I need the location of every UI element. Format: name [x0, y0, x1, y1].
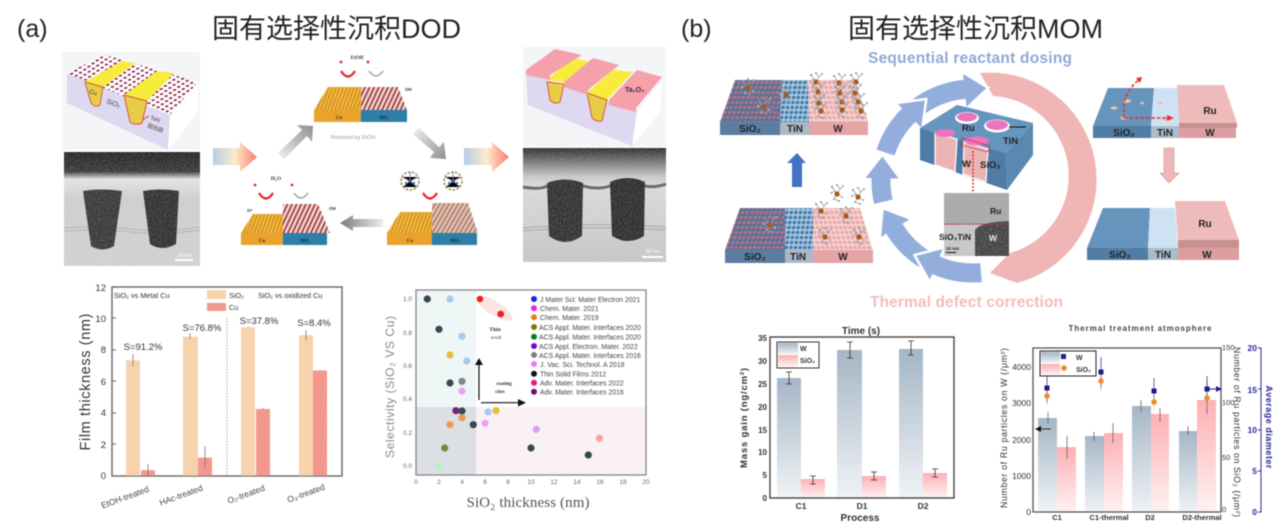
arrow: grey left	[340, 215, 383, 231]
panel: TEM image before deposition: 50 nm	[178, 253, 192, 259]
chart: selectivity scatter plot: 10	[527, 479, 535, 486]
panel: slab, second dose: W	[833, 124, 843, 135]
panel: slab, first dose: SiO₂	[744, 252, 766, 263]
arrow: gradient arrow to result	[464, 142, 509, 172]
legend: SiO₂	[800, 358, 815, 365]
panel: central TEM inset: Ru	[990, 206, 1001, 216]
arrow: grey down-right	[413, 128, 446, 159]
heading: thermal defect correction: Thermal defect correction	[870, 294, 1063, 311]
title: DOD: 固有选择性沉积DOD	[212, 14, 461, 44]
legend: J. Vac. Sci. Technol. A 2018	[540, 362, 625, 369]
panel: selective Ta2O5 schematic	[523, 47, 666, 147]
panel: ALD cycle, EtOH restored surface	[314, 56, 412, 141]
panel: precursor step surface	[387, 172, 478, 245]
chart: mass gain: 25	[758, 380, 768, 389]
legend: Cu	[229, 303, 238, 312]
chart: film thickness bar chart: 6	[101, 377, 106, 388]
panel: central Ru/W/SiO2 block	[920, 105, 1033, 193]
panel label (a): (a)	[17, 15, 48, 43]
legend: Chem. Mater. 2019	[540, 315, 599, 322]
chart: film thickness bar chart: 10	[95, 314, 106, 325]
chart: Ru particle density: C1	[1052, 513, 1062, 522]
blue arrow 4	[846, 54, 1100, 308]
legend: ACS Appl. Mater. Interfaces 2020	[539, 325, 641, 332]
panel: central Ru/W/SiO2 block: W	[962, 159, 971, 170]
legend: ACS Appl. Electron. Mater. 2022	[539, 344, 638, 351]
panel: H2O step surface: H₂O	[271, 176, 282, 182]
chart: Ru particle density: Number of Ru particles on SiO₂ (/μm²)	[1232, 347, 1242, 517]
chart: selectivity scatter plot: SiO₂ thickness (nm)	[466, 495, 590, 511]
panel: slab with particles: Ru	[1203, 106, 1217, 117]
chart: selectivity scatter plot: Thin	[489, 327, 501, 333]
chart: Ru particle density: 4000	[1012, 362, 1031, 372]
chart: film thickness bar chart: 12	[95, 283, 106, 294]
SiO2 bars	[126, 327, 313, 476]
chart: mass gain: 10	[758, 448, 768, 457]
panel: initial Cu/SiO2 trench schematic: 阻挡层	[146, 121, 165, 135]
chart: Ru particle density: C1-thermal	[1089, 513, 1129, 522]
panel: H2O step surface	[241, 176, 336, 245]
chart: selectivity scatter plot: 0	[414, 479, 418, 486]
chart: Ru particle density: 15	[1248, 385, 1257, 395]
panel: H2O step surface: O*	[247, 208, 253, 213]
legend: W	[1076, 355, 1083, 362]
chart: selectivity scatter plot: 2	[437, 479, 441, 486]
chart: film thickness bar chart: EtOH-treated	[100, 484, 150, 510]
panel: TEM image before deposition	[64, 152, 200, 266]
chart: mass gain: 20	[758, 403, 768, 412]
blue arrow 5	[873, 81, 1073, 282]
W bars	[1038, 406, 1197, 512]
panel: central Ru/W/SiO2 block: Ru	[962, 123, 975, 134]
W bars	[777, 349, 923, 498]
panel: slab with continuous Ru	[1087, 201, 1239, 261]
chart: selectivity scatter plot	[383, 290, 650, 511]
chart: selectivity scatter plot: 0.6	[403, 363, 412, 370]
SiO2 bars	[801, 473, 947, 498]
chart: selectivity scatter plot: cites	[495, 390, 505, 395]
panel: initial Cu/SiO2 trench schematic: SiO₂	[105, 98, 121, 110]
chart: mass gain: C1	[796, 501, 807, 511]
chart: mass gain: 5	[763, 471, 768, 480]
legend: Adv. Mater. Interfaces 2022	[540, 380, 624, 388]
panel: ALD cycle, EtOH restored surface: Restored by EtOH	[331, 135, 375, 141]
chart: Ru particle density	[999, 324, 1274, 522]
chart: mass gain: 0	[763, 494, 768, 503]
legend: Chem. Mater. 2021	[540, 306, 599, 313]
chart: selectivity scatter plot: Selectivity (SiO₂ VS Cu)	[383, 316, 397, 458]
chart: selectivity scatter plot: work	[490, 335, 502, 341]
chart: Ru particle density: 3000	[1012, 398, 1031, 408]
arrow: blue up	[787, 153, 806, 187]
chart: mass gain: 15	[758, 426, 768, 435]
chart: Ru particle density: 50	[1222, 453, 1230, 462]
panel: central Ru/W/SiO2 block: TiN	[1003, 136, 1018, 147]
chart: mass gain: Mass gain (ng/cm²)	[739, 368, 750, 468]
legend: ACS Appl. Mater. Interfaces 2020	[539, 334, 641, 342]
arrow: gradient arrow to cycle	[213, 142, 257, 172]
legend	[114, 290, 322, 312]
chart: film thickness bar chart: O₂-treated	[226, 483, 266, 506]
legend: SiO₂	[229, 291, 244, 300]
legend: Adv. Mater. Interfaces 2016	[540, 390, 624, 396]
chart: selectivity scatter plot: 0.8	[403, 330, 412, 337]
panel: central TEM inset: 10 nm	[946, 246, 959, 251]
panel: TEM image after deposition: 50 nm	[646, 249, 660, 255]
panel: H2O step surface: SiO₂	[300, 239, 310, 244]
panel: slab, second dose: SiO₂	[739, 124, 761, 135]
panel: ALD cycle, EtOH restored surface: SiO₂	[379, 116, 389, 121]
panel: slab, first dose: W	[838, 252, 848, 263]
legend: W	[800, 346, 807, 353]
chart: film thickness bar chart: S=37.8%	[240, 316, 279, 327]
chart: Ru particle density: 100	[1222, 398, 1235, 407]
chart: mass gain: Time (s)	[842, 326, 880, 337]
chart: selectivity scatter plot: 4	[460, 479, 464, 486]
chart: selectivity scatter plot: 16	[596, 479, 604, 486]
panel: central TEM inset	[939, 193, 1009, 256]
chart: selectivity scatter plot: 6	[483, 479, 487, 486]
title: MOM: 固有选择性沉积MOM	[848, 14, 1103, 44]
panel: H2O step surface: Cu	[259, 239, 265, 244]
chart: Ru particle density: 0	[1026, 507, 1031, 517]
panel: selective Ta2O5 schematic: Ta₂O₅	[625, 87, 644, 94]
chart: selectivity scatter plot: coating	[496, 382, 512, 387]
panel: slab, first dose	[725, 184, 873, 263]
chart: film thickness bar chart: S=76.8%	[183, 323, 222, 334]
arrow: grey up-right	[278, 125, 313, 159]
arrow: pink down	[1160, 148, 1179, 183]
panel: ALD cycle, EtOH restored surface: EtOH	[351, 56, 363, 61]
panel: central Ru/W/SiO2 block: SiO₂	[980, 160, 1001, 171]
legend: SiO₂ vs Metal Cu	[114, 291, 170, 300]
panel: slab with continuous Ru: W	[1202, 250, 1212, 261]
legend: SiO₂ vs oxidized Cu	[258, 291, 322, 300]
chart: Ru particle density: 10	[1248, 425, 1257, 435]
panel: central TEM inset: SiO₂TiN	[939, 232, 971, 242]
chart: film thickness bar chart: 8	[101, 345, 106, 356]
chart: selectivity scatter plot: 18	[619, 479, 627, 486]
panel: central TEM inset: W	[989, 233, 998, 243]
legend: J Mater Sci: Mater Electron 2021	[540, 297, 641, 304]
legend: Thin Solid Films 2012	[540, 372, 606, 378]
panel: ALD cycle, EtOH restored surface: Cu	[336, 116, 342, 121]
chart: selectivity scatter plot: 14	[573, 479, 581, 486]
panel: slab with particles: W	[1205, 128, 1215, 139]
chart: film thickness bar chart: 0	[101, 471, 106, 482]
panel: precursor step surface: SiO₂	[450, 239, 460, 244]
cycle: blue arrows	[844, 52, 1102, 310]
chart: film thickness bar chart: HAc-treated	[158, 483, 204, 508]
chart: mass gain: D2	[918, 501, 929, 511]
chart: mass gain: D1	[857, 501, 868, 511]
chart: Ru particle density: Average diameter	[1264, 386, 1274, 469]
legend	[531, 296, 641, 396]
panel: TEM image after deposition	[523, 148, 666, 262]
chart: mass gain	[739, 326, 954, 524]
panel: slab, first dose: TiN	[790, 252, 806, 263]
chart: film thickness bar chart: Film thickness (nm)	[78, 314, 94, 450]
chart: Ru particle density: 20	[1248, 343, 1257, 353]
SiO2 bars	[1057, 400, 1216, 512]
chart: Ru particle density: 2000	[1012, 435, 1031, 445]
chart: film thickness bar chart	[78, 283, 342, 510]
chart: selectivity scatter plot: 1.0	[403, 296, 412, 303]
chart: Ru particle density: Number of Ru particles on W (/μm²)	[999, 348, 1009, 508]
chart: film thickness bar chart: S=91.2%	[124, 342, 163, 353]
panel: slab with particles: SiO₂	[1113, 128, 1135, 139]
chart: mass gain: Process	[841, 513, 880, 524]
chart: mass gain: 30	[758, 357, 768, 366]
panel: slab with particles: TiN	[1157, 128, 1173, 139]
panel: H2O step surface: OH	[329, 206, 336, 211]
panel: slab with continuous Ru: Ru	[1198, 219, 1212, 230]
blue arrow 2	[857, 65, 1089, 297]
blue arrow 1	[844, 52, 1102, 310]
chart: film thickness bar chart: 2	[101, 440, 106, 451]
chart: selectivity scatter plot: 20	[642, 479, 650, 486]
panel label (b): (b)	[681, 15, 712, 43]
chart: Ru particle density: Thermal treatment atmosphere	[1068, 324, 1212, 333]
panel: ALD cycle, EtOH restored surface: OH	[405, 87, 412, 92]
legend: SiO₂	[1076, 367, 1091, 374]
panel: slab, second dose	[720, 72, 868, 135]
panel: slab with continuous Ru: SiO₂	[1109, 250, 1131, 261]
chart: Ru particle density: 1000	[1012, 471, 1031, 481]
chart: Ru particle density: 150	[1222, 343, 1235, 352]
Cu bars	[141, 370, 327, 476]
chart: selectivity scatter plot: 8	[506, 479, 510, 486]
cycle: pink arc arrow	[980, 73, 1097, 283]
chart: Ru particle density: 0	[1252, 507, 1257, 517]
panel: slab, second dose: TiN	[787, 124, 803, 135]
chart: film thickness bar chart: 4	[101, 408, 106, 419]
legend: ACS Appl. Mater. Interfaces 2016	[539, 353, 641, 360]
chart: Ru particle density: D2	[1145, 513, 1155, 522]
panel: initial Cu/SiO2 trench schematic: Cu	[88, 89, 98, 97]
panel: precursor step surface: Cu	[407, 239, 413, 244]
chart: selectivity scatter plot: 12	[550, 479, 558, 486]
legend	[1040, 351, 1096, 376]
blue arrow 3	[863, 71, 1083, 291]
chart: Ru particle density: 5	[1252, 466, 1257, 476]
panel: slab with particles	[1093, 77, 1237, 139]
panel: initial Cu/SiO2 trench schematic: TaN	[149, 115, 161, 124]
chart: selectivity scatter plot: 0.0	[403, 463, 412, 470]
chart: film thickness bar chart: S=8.4%	[297, 318, 331, 329]
legend	[777, 342, 819, 368]
chart: mass gain: 35	[758, 334, 768, 343]
panel: initial Cu/SiO2 trench schematic	[62, 52, 200, 150]
chart: selectivity scatter plot: 0.2	[403, 430, 412, 437]
chart: selectivity scatter plot: 0.4	[403, 396, 412, 403]
chart: Ru particle density: 0	[1222, 505, 1226, 514]
panel: slab with continuous Ru: TiN	[1155, 250, 1171, 261]
chart: film thickness bar chart: O₃-treated	[286, 482, 326, 505]
heading: sequential reactant dosing: Sequential reactant dosing	[868, 50, 1072, 67]
chart: Ru particle density: D2-thermal	[1182, 513, 1222, 522]
